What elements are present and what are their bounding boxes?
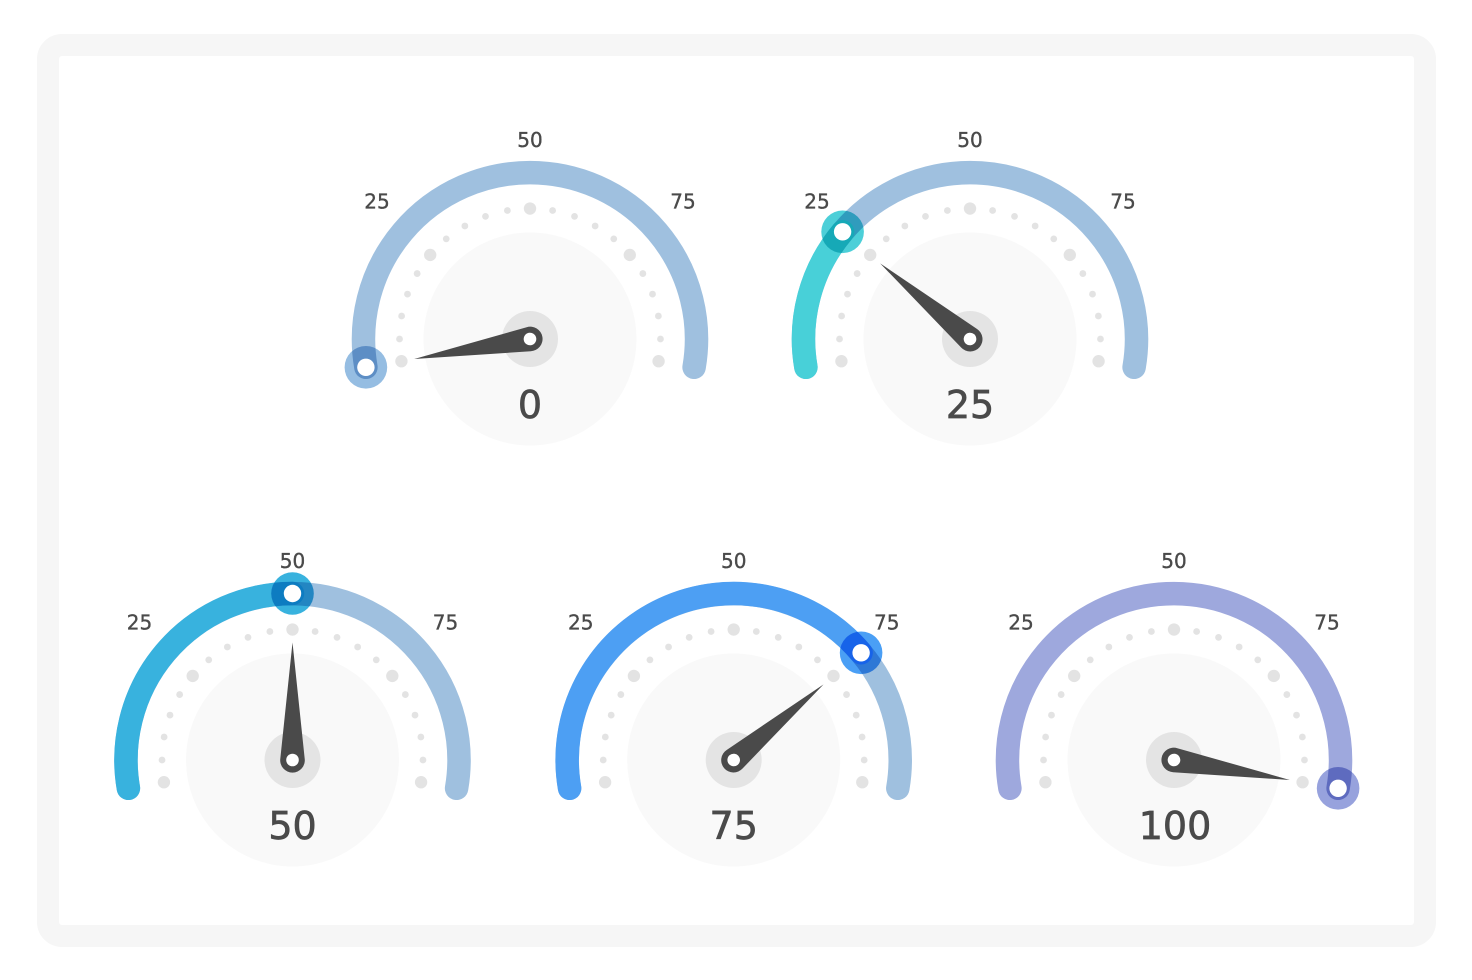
needle (280, 642, 305, 773)
inner disk (424, 232, 636, 446)
gauge: value 50 (126, 549, 459, 866)
needle (872, 254, 988, 357)
scale labels: 75 (1314, 610, 1340, 634)
track arc (804, 173, 1136, 367)
value: 0 (518, 383, 542, 427)
track arc (1008, 594, 1340, 788)
knob (840, 632, 882, 674)
scale labels: 50 (280, 549, 305, 573)
scale labels: 75 (433, 610, 458, 634)
knob (271, 572, 314, 615)
inner disk (186, 654, 399, 866)
value: 50 (268, 804, 317, 848)
gauge: value 75 (567, 549, 900, 866)
scale labels: 50 (957, 128, 983, 152)
tick dots (835, 202, 1105, 367)
hub (264, 732, 320, 788)
value: 100 (1139, 804, 1211, 848)
tick dots (395, 202, 665, 367)
needle (1160, 746, 1292, 792)
track arc (126, 594, 459, 788)
scale labels: 50 (517, 128, 543, 152)
hub (706, 732, 762, 788)
scale labels: 50 (721, 549, 746, 573)
track arc (364, 173, 696, 367)
gauge: value 100 (1008, 549, 1359, 866)
hub (1146, 732, 1202, 788)
inner disk (864, 232, 1076, 446)
hub (942, 311, 998, 367)
needle (412, 325, 544, 371)
knob (1317, 767, 1359, 810)
value: 75 (710, 804, 758, 848)
scale labels (127, 549, 458, 634)
progress arc (803, 232, 843, 367)
value: 25 (946, 383, 994, 427)
progress arc (567, 593, 861, 788)
knob (345, 346, 387, 389)
scale labels: 75 (670, 189, 696, 213)
scale labels: 25 (364, 189, 390, 213)
scale labels: 50 (1161, 549, 1187, 573)
scale labels: 75 (1110, 189, 1136, 213)
scale labels (364, 128, 696, 213)
scale labels: 25 (804, 189, 830, 213)
gauge: value 0 (345, 128, 696, 446)
track arc (567, 594, 900, 788)
hub (502, 311, 558, 367)
scale labels: 25 (568, 610, 593, 634)
tick dots (599, 623, 868, 788)
tick dots (1039, 623, 1309, 788)
scale labels: 25 (127, 610, 152, 634)
knob (821, 210, 864, 253)
progress arc (126, 594, 292, 788)
scale labels (804, 128, 1136, 213)
needle (716, 675, 832, 778)
inner disk (1068, 654, 1280, 866)
scale labels: 75 (874, 610, 899, 634)
inner disk (627, 654, 840, 866)
gauge: value 25 (803, 128, 1136, 446)
scale labels: 25 (1008, 610, 1034, 634)
scale labels (568, 549, 899, 634)
scale labels (1008, 549, 1340, 634)
tick dots (158, 623, 427, 788)
